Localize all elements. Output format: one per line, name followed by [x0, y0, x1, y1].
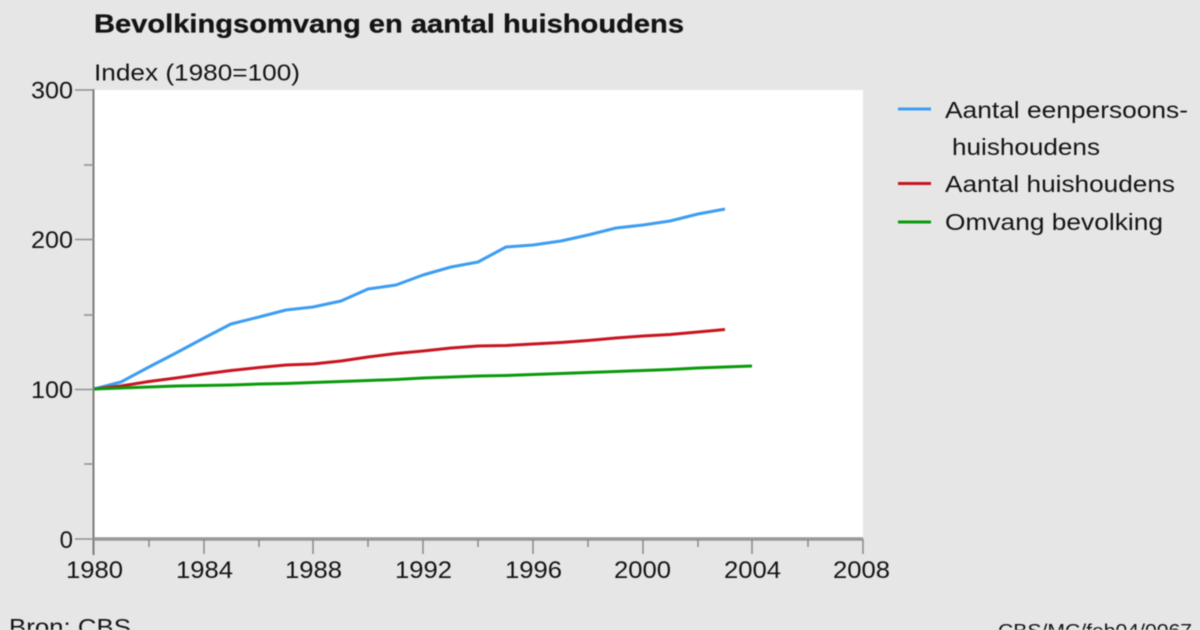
x axis	[66, 539, 890, 584]
legend item: aantal huishoudens: Aantal huishoudens	[945, 171, 1175, 197]
chart: line chart with axes	[31, 78, 890, 584]
legend	[898, 97, 1188, 235]
line: aantal huishoudens	[94, 330, 725, 389]
x axis: 1984	[176, 557, 233, 584]
plot area	[94, 90, 863, 538]
x axis: 1988	[285, 557, 342, 584]
y axis: 0	[60, 527, 73, 554]
y axis: 300	[31, 78, 73, 104]
x axis: 1996	[505, 557, 562, 584]
legend item: omvang bevolking: Omvang bevolking	[945, 209, 1163, 235]
y-axis unit label: Index (1980=100)	[94, 60, 300, 86]
legend item: aantal eenpersoonshuishoudens	[898, 97, 1188, 160]
legend item: aantal eenpersoonshuishoudens: Aantal eenpersoons-	[945, 97, 1188, 123]
x axis: 1992	[395, 557, 452, 584]
line: aantal eenpersoonshuishoudens	[94, 209, 725, 389]
y axis	[31, 78, 94, 555]
x axis: 2004	[724, 557, 781, 584]
y axis: 100	[31, 377, 73, 404]
x axis: 1980	[66, 557, 123, 584]
legend item: aantal eenpersoonshuishoudens: huishoudens	[952, 134, 1100, 160]
y axis: 200	[31, 227, 73, 254]
x axis: 2000	[614, 557, 671, 584]
line: omvang bevolking	[94, 366, 752, 389]
title: Bevolkingsomvang en aantal huishoudens	[94, 8, 684, 38]
x axis: 2008	[833, 557, 890, 584]
